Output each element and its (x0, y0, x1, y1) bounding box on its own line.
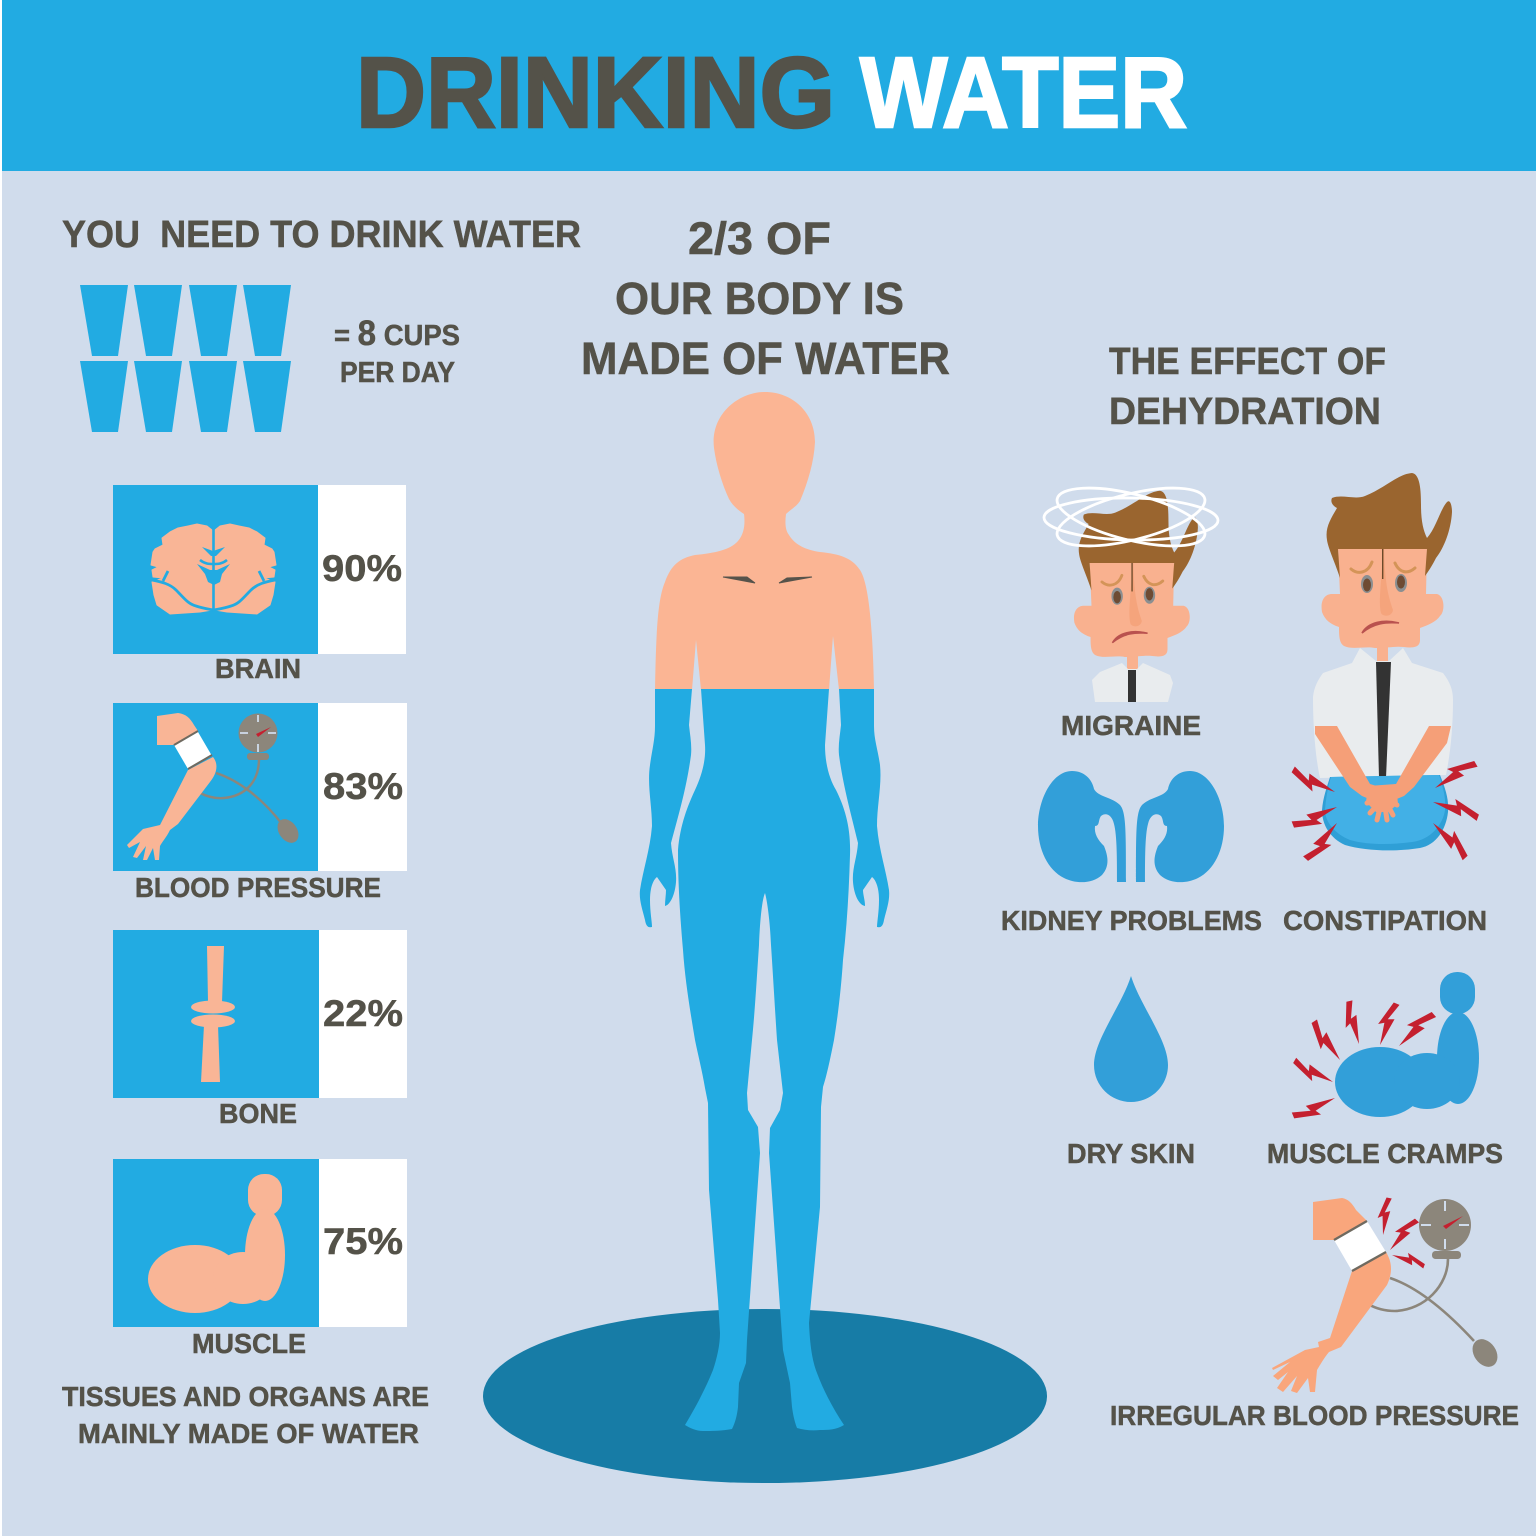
icon: water drop (1094, 976, 1168, 1102)
icon: arm with blood pressure gauge (127, 713, 303, 860)
panel: blood pressure (113, 703, 407, 871)
heading: the effect of dehydration: DEHYDRATION (1109, 391, 1381, 433)
icon: irregular blood pressure arm (1272, 1197, 1503, 1393)
right arm: water (839, 689, 889, 927)
heading: the effect of dehydration: THE EFFECT OF (1109, 341, 1386, 383)
label: irregular blood pressure: IRREGULAR BLOOD PRESSURE (1110, 1400, 1519, 1431)
panel: brain (113, 485, 406, 654)
shirt (1313, 648, 1453, 778)
label: constipation: CONSTIPATION (1283, 905, 1487, 936)
upper body: not water (655, 392, 874, 690)
text: 8 cups per day: PER DAY (340, 357, 455, 389)
text: tissues and organs: MAINLY MADE OF WATER (78, 1418, 419, 1449)
header band (2, 0, 1536, 171)
left arm: water (640, 689, 692, 927)
title: DRINKING (356, 37, 835, 149)
arms and clasped hands (1315, 726, 1451, 820)
human body figure (640, 392, 889, 1431)
value: 90%: 90% (322, 548, 402, 589)
label: kidney problems: KIDNEY PROBLEMS (1001, 905, 1262, 936)
shirt (1092, 663, 1173, 702)
text: tissues and organs: TISSUES AND ORGANS ARE (62, 1381, 429, 1412)
heading: 2/3 of our body is made of water: MADE OF WATER (581, 333, 950, 384)
head (1074, 491, 1198, 657)
head (1322, 473, 1452, 648)
floor shadow (483, 1309, 1047, 1483)
label: blood pressure: BLOOD PRESSURE (135, 872, 381, 903)
heading: 2/3 of our body is made of water: OUR BODY IS (615, 273, 904, 324)
label: dry skin: DRY SKIN (1067, 1138, 1195, 1169)
icon: muscle cramps (1290, 972, 1479, 1124)
heading: the effect of dehydration (1109, 341, 1386, 433)
icon: flexed muscle (148, 1174, 285, 1313)
icon: eight cups (80, 285, 291, 432)
icon: bone joint (191, 946, 235, 1082)
torso and legs: water (678, 689, 850, 1431)
text: 8 cups per day: = 8 CUPS (334, 314, 460, 353)
heading: 2/3 of our body is made of water: 2/3 OF (688, 213, 831, 264)
value: 22%: 22% (323, 993, 403, 1034)
pain bolts (1288, 755, 1481, 865)
text: tissues and organs (62, 1381, 429, 1449)
label: muscle: MUSCLE (192, 1328, 306, 1359)
value: 75%: 75% (323, 1221, 403, 1262)
label: brain: BRAIN (215, 653, 301, 684)
dizzy rings (1044, 476, 1218, 558)
neck (1377, 645, 1388, 665)
collarbones (723, 577, 812, 583)
title: WATER (860, 37, 1187, 149)
title (356, 37, 1187, 149)
icon: brain (151, 524, 276, 614)
label: muscle cramps: MUSCLE CRAMPS (1267, 1138, 1503, 1169)
text: 8 cups per day (334, 314, 460, 389)
label: migraine: MIGRAINE (1061, 710, 1201, 741)
label: bone: BONE (219, 1098, 297, 1129)
icon: migraine man (1044, 476, 1218, 702)
trousers (1322, 775, 1448, 850)
icon: kidneys (1038, 771, 1224, 882)
heading: 2/3 of our body is made of water (581, 213, 950, 384)
value: 83%: 83% (323, 766, 403, 807)
heading: you need to drink water: YOU NEED TO DRINK WATER (62, 214, 581, 256)
panel: bone (113, 930, 407, 1098)
neck (1127, 652, 1138, 672)
tie (1128, 670, 1136, 702)
icon: constipation man (1288, 473, 1481, 865)
panel: muscle (113, 1159, 407, 1327)
tie (1376, 662, 1391, 778)
